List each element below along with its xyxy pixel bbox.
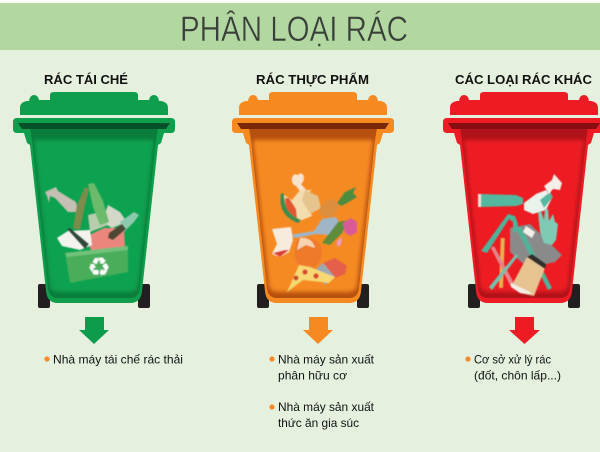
arrow: orange down	[303, 317, 333, 344]
icon: recycling symbol: ♻	[87, 253, 111, 283]
arrow: green down	[79, 317, 109, 344]
panel: green recycling bin column	[13, 72, 183, 366]
arrow: red down	[509, 317, 540, 344]
destination text: compost and feed plants: thức ăn gia súc	[278, 416, 359, 430]
orange bin	[232, 92, 394, 308]
destination text: compost and feed plants	[269, 352, 375, 430]
destination text: compost and feed plants: phân hữu cơ	[278, 368, 347, 382]
header band	[0, 3, 600, 50]
destination text: compost and feed plants: Nhà máy sản xuất	[278, 352, 375, 366]
destination text: compost and feed plants: Nhà máy sản xuất	[278, 400, 375, 414]
illustration: recyclable trash	[45, 183, 139, 283]
heading: recyclable waste: RÁC TÁI CHÉ	[44, 72, 128, 87]
title: PHÂN LOẠI RÁC	[180, 10, 408, 49]
red bin	[443, 92, 600, 308]
destination text: waste treatment facility: (đốt, chôn lấp...)	[474, 368, 561, 382]
destination text: recycling plant: Nhà máy tái chế rác thải	[53, 352, 183, 366]
panel: red other waste bin column	[443, 72, 600, 382]
destination text: waste treatment facility	[465, 352, 561, 382]
destination text: waste treatment facility: Cơ sở xử lý rác	[474, 352, 551, 366]
heading: food waste: RÁC THỰC PHẨM	[256, 72, 369, 87]
illustration: food scraps	[272, 173, 357, 292]
heading: other waste: CÁC LOẠI RÁC KHÁC	[455, 72, 592, 87]
illustration: other trash	[478, 174, 562, 296]
panel: orange food waste bin column	[232, 72, 394, 430]
green bin	[13, 92, 175, 308]
